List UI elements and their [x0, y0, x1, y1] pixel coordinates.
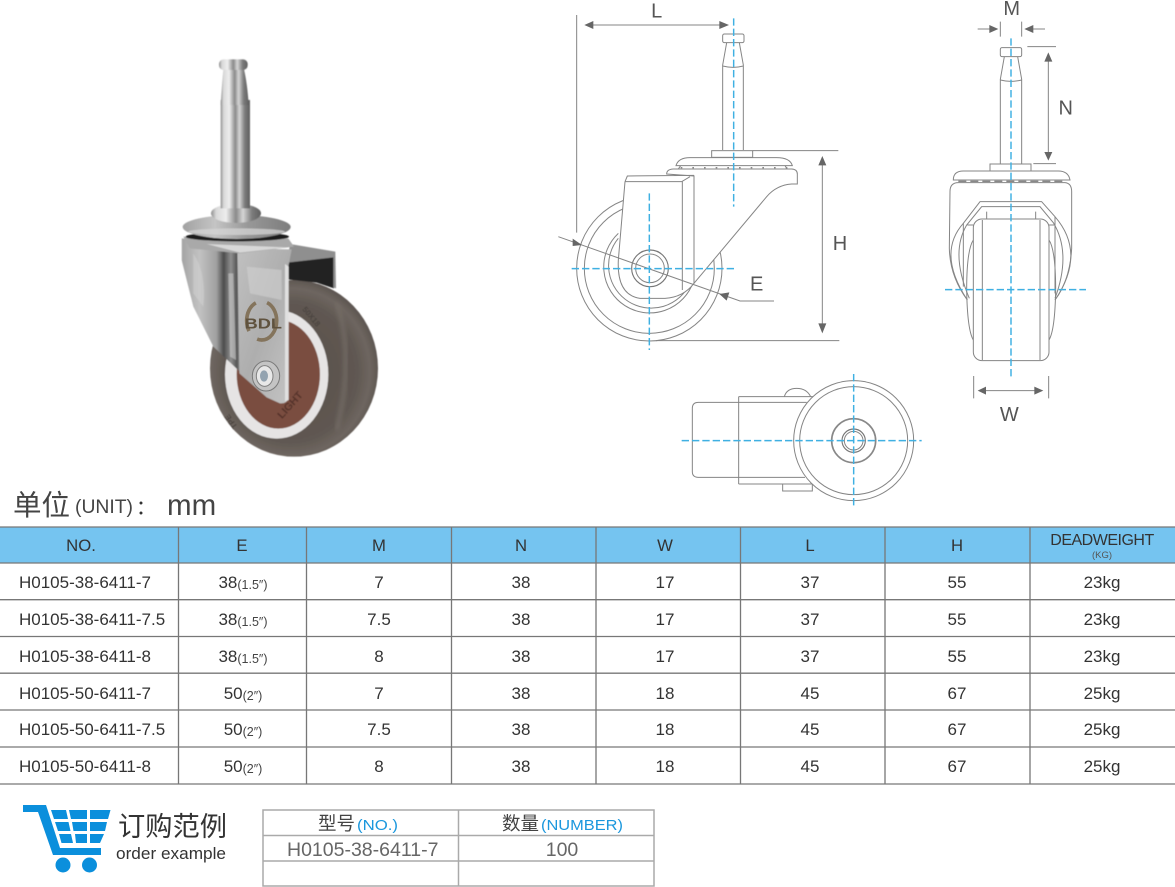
hub lettering: LIGHT	[275, 389, 306, 421]
product photo: caster	[182, 59, 378, 457]
row 1: 55	[948, 573, 966, 592]
table header: E	[236, 536, 248, 555]
row 3: 17	[656, 647, 674, 666]
row 3: 38	[512, 647, 530, 666]
row 2: 55	[948, 610, 966, 629]
dimension W: W	[1000, 404, 1019, 426]
centre lines	[945, 38, 1086, 377]
row 4: 18	[656, 684, 674, 703]
unit label: 单位	[13, 490, 70, 522]
bracket	[692, 402, 739, 477]
row 6: 38	[512, 757, 530, 776]
tyre lettering: 50X18	[300, 305, 322, 329]
row 1: 38	[218, 573, 237, 592]
order header: 型号	[318, 813, 355, 834]
wheel	[967, 240, 1056, 340]
row 5: 18	[656, 720, 674, 739]
bracket shoulder	[183, 237, 294, 253]
flange	[183, 215, 291, 239]
table header	[0, 527, 1175, 563]
unit label: mm	[167, 489, 216, 522]
row 1: (1.5″)	[237, 578, 268, 592]
row 3: 37	[801, 647, 819, 666]
stem shaft	[221, 100, 250, 208]
table header: H	[951, 536, 963, 555]
swivel plate	[676, 158, 792, 169]
row 6	[19, 757, 1120, 776]
white ring	[225, 310, 328, 439]
order example heading: order example	[116, 845, 226, 863]
dimension E: E	[750, 274, 763, 296]
bracket side mottling	[193, 253, 236, 360]
row 5: 50	[224, 720, 243, 739]
dimension N	[1027, 47, 1073, 164]
row 3: H0105-38-6411-8	[19, 647, 151, 666]
order example table: 100	[546, 839, 578, 861]
row 6: 8	[374, 757, 384, 776]
row 5	[19, 720, 1120, 739]
table header: M	[372, 536, 386, 555]
row 2: 38	[512, 610, 530, 629]
row 6: (2″)	[243, 762, 262, 776]
dimension E	[558, 237, 774, 301]
dimension N: N	[1058, 97, 1073, 119]
row 2: (1.5″)	[237, 615, 268, 629]
row 3: 23kg	[1084, 647, 1120, 666]
row 4: 7	[374, 684, 384, 703]
bracket top rim	[287, 244, 336, 288]
row 5: 38	[512, 720, 530, 739]
row 1: H0105-38-6411-7	[19, 573, 151, 592]
row 6: 25kg	[1084, 757, 1120, 776]
fork arcs	[951, 202, 1071, 300]
axle bearing	[632, 250, 668, 287]
stem cap	[219, 59, 248, 70]
unit label: (UNIT)	[75, 497, 133, 518]
top view drawing	[682, 374, 922, 507]
row 3: (1.5″)	[237, 652, 268, 666]
row 1: 38	[512, 573, 530, 592]
row 5: 45	[801, 720, 819, 739]
bracket inner shadow	[287, 257, 334, 288]
table grid	[0, 527, 1175, 784]
icon: shopping cart	[23, 805, 110, 872]
order row: H0105-38-6411-7	[287, 839, 438, 861]
swivel plate	[953, 171, 1070, 180]
row 4: 38	[512, 684, 530, 703]
row 4: 45	[801, 684, 819, 703]
row 5: H0105-50-6411-7.5	[19, 720, 165, 739]
dimension H: H	[833, 233, 847, 255]
flange underside	[186, 232, 289, 241]
row 2: 7.5	[367, 610, 391, 629]
dimension L: L	[651, 0, 662, 22]
row 5: (2″)	[243, 725, 262, 739]
side view drawing	[945, 0, 1086, 426]
row 5: 7.5	[367, 720, 391, 739]
tyre crease highlight	[337, 303, 346, 430]
unit label: ：	[136, 497, 156, 519]
row 3: 8	[374, 647, 384, 666]
row 3: 38	[218, 647, 237, 666]
bracket	[618, 169, 797, 298]
row 6: 67	[948, 757, 966, 776]
row 6: 18	[656, 757, 674, 776]
table header: DEADWEIGHT	[1050, 532, 1154, 549]
row 2: 17	[656, 610, 674, 629]
order example table: 数量	[502, 813, 539, 834]
row 6: 50	[224, 757, 243, 776]
row 4: H0105-50-6411-7	[19, 684, 151, 703]
row 1	[19, 573, 1120, 592]
logo	[245, 301, 282, 340]
table header: (KG)	[1092, 550, 1112, 561]
row 2: H0105-38-6411-7.5	[19, 610, 165, 629]
row 2: 38	[218, 610, 237, 629]
collar	[211, 204, 261, 223]
row 2: 37	[801, 610, 819, 629]
stem neck	[221, 69, 249, 105]
row 1: 37	[801, 573, 819, 592]
axle bolt	[252, 361, 280, 391]
dimension H	[656, 151, 847, 341]
row 2	[19, 610, 1120, 629]
row 5: 25kg	[1084, 720, 1120, 739]
order example heading	[116, 812, 227, 863]
row 4: (2″)	[243, 689, 262, 703]
bracket front	[237, 248, 292, 403]
bracket side	[182, 238, 242, 373]
row 5: 67	[948, 720, 966, 739]
front view drawing	[558, 0, 847, 350]
specification table	[0, 527, 1175, 784]
brown hub	[237, 320, 320, 429]
fork outer	[949, 183, 1072, 300]
row 4: 50	[224, 684, 243, 703]
dimension M	[978, 0, 1045, 37]
table header: W	[657, 536, 673, 555]
row 3: 55	[948, 647, 966, 666]
row 1: 23kg	[1084, 573, 1120, 592]
order example heading: 订购范例	[118, 812, 227, 842]
table header: N	[515, 536, 527, 555]
wheel tyre	[210, 280, 378, 457]
centre lines	[572, 18, 735, 350]
row 4: 67	[948, 684, 966, 703]
stem	[723, 43, 743, 150]
row 1: 17	[656, 573, 674, 592]
order example table	[263, 810, 654, 886]
table header: NO.	[66, 536, 96, 555]
row 3	[19, 647, 1120, 666]
centre lines	[682, 374, 922, 507]
order example table: (NUMBER)	[541, 817, 623, 834]
order example table: (NO.)	[357, 817, 398, 834]
logo: BDL	[245, 317, 282, 333]
row 6: H0105-50-6411-8	[19, 757, 151, 776]
row 4: 25kg	[1084, 684, 1120, 703]
wheel outlines	[577, 196, 722, 341]
row 6: 45	[801, 757, 819, 776]
unit label	[13, 489, 216, 522]
row 2: 23kg	[1084, 610, 1120, 629]
row 1: 7	[374, 573, 384, 592]
row 4	[19, 684, 1120, 703]
stem	[1000, 57, 1022, 164]
dimension L	[577, 0, 729, 233]
dimension W	[974, 376, 1049, 426]
product photo: caster: TPE	[223, 412, 239, 430]
wheel	[794, 381, 914, 501]
table header: L	[805, 536, 815, 555]
